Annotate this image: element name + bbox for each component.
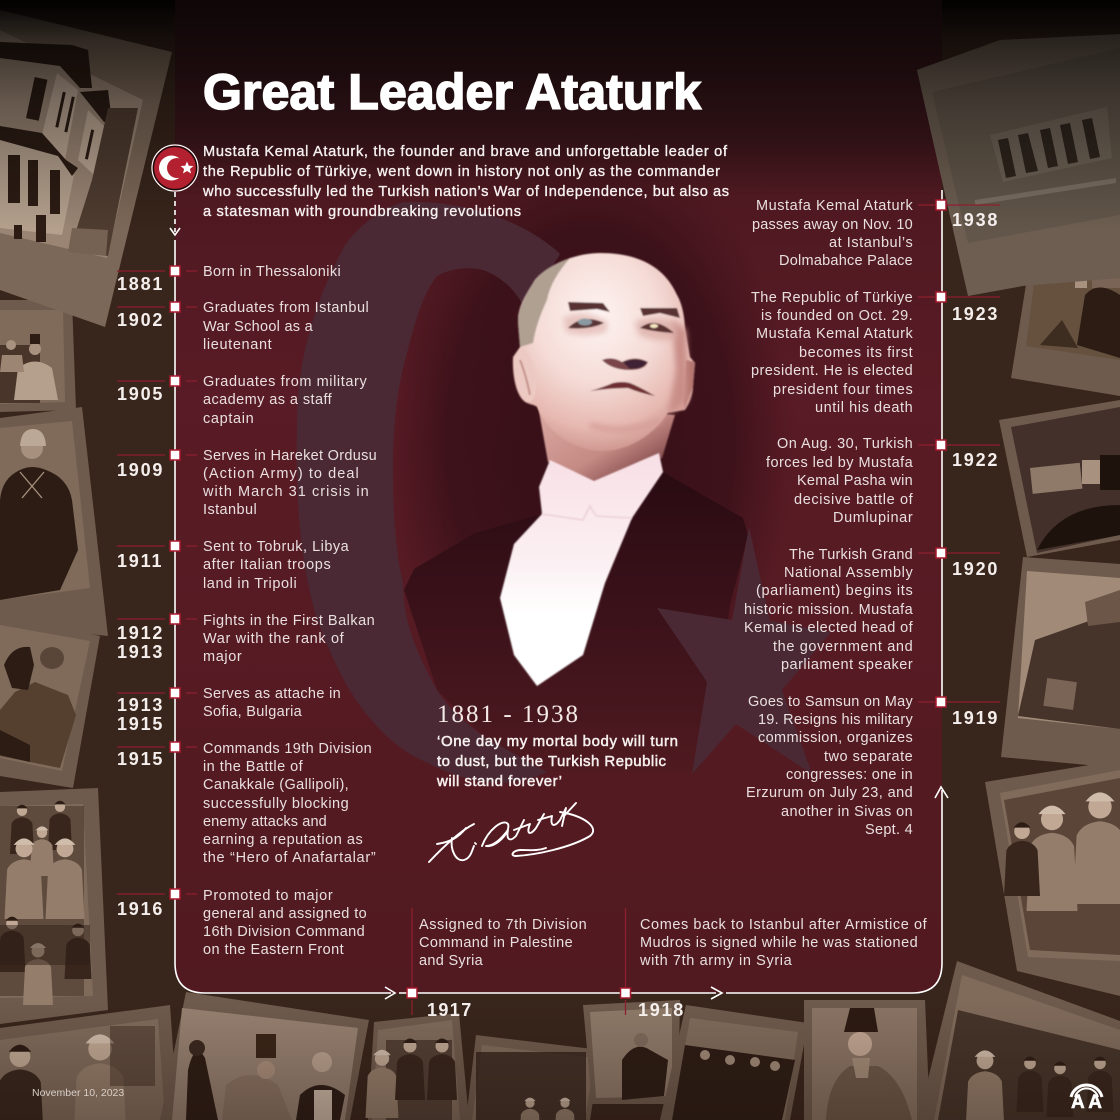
1916 entry [117,888,367,958]
1920 entry: historic mission. Mustafa [744,602,914,618]
1902 entry: lieutenant [203,337,272,353]
1905 entry: 1905 [117,384,164,404]
1915 entry: the “Hero of Anafartalar” [203,850,376,866]
flag watermark: star [657,527,831,774]
1912 1913 entry [117,613,375,665]
1938 entry: passes away on Nov. 10 [752,217,913,233]
1915 entry [117,741,376,866]
1911 entry [117,539,350,592]
quote: to dust, but the Turkish Republic [437,753,666,770]
1909 entry: 1909 [117,460,164,480]
1919 entry: Goes to Samsun on May [748,694,913,710]
1922 entry: On Aug. 30, Turkish [777,436,913,452]
neck [537,400,675,484]
photo: crowd [466,1035,601,1120]
shirt and collar [500,453,663,686]
1938 entry: at Istanbul’s [829,235,913,251]
1919 entry: Sept. 4 [865,822,913,838]
1905 entry: academy as a staff [203,392,333,408]
intro text: the Republic of Türkiye, went down in history not only as the commander [203,164,720,180]
central burgundy panel [175,0,942,993]
1913 1915 entry: Serves as attache in [203,686,341,702]
1913 1915 entry: 1913 [117,695,164,715]
photo: reception with column [1011,210,1120,396]
1917 entry: Assigned to 7th Division [419,917,587,933]
1918 entry: 1918 [638,1000,685,1020]
1915 entry: in the Battle of [203,759,304,775]
1916 entry: 1916 [117,899,164,919]
1909 entry: Serves in Hareket Ordusu [203,448,377,464]
photo: two men bottom left [0,1005,178,1120]
1912 1913 entry: 1913 [117,642,164,662]
photo: speaker on steps [1001,557,1120,768]
1923 entry [751,290,1000,416]
dark right fade over photos [917,0,1120,230]
1920 entry: parliament speaker [781,657,913,673]
quote: will stand forever’ [436,773,562,790]
portrait of Ataturk [404,253,748,772]
1912 1913 entry: major [203,649,242,665]
1913 1915 entry: Sofia, Bulgaria [203,704,303,720]
1916 entry: general and assigned to [203,906,367,922]
1923 entry: is founded on Oct. 29. [761,308,913,324]
1913 1915 entry [117,686,341,734]
photo: soldier [0,407,108,636]
1912 1913 entry: 1912 [117,623,164,643]
1905 entry: captain [203,411,254,427]
1938 entry: 1938 [952,210,999,230]
1922 entry: decisive battle of [794,492,914,508]
1902 entry [117,300,369,353]
1902 entry: 1902 [117,310,164,330]
1919 entry: another in Sivas on [781,804,913,820]
1919 entry: congresses: one in [786,767,913,783]
1909 entry: with March 31 crisis in [202,484,369,500]
1938 entry [752,198,1000,269]
1911 entry: after Italian troops [203,557,331,573]
1920 entry: 1920 [952,559,999,579]
left timeline entries [117,264,377,958]
1923 entry: Mustafa Kemal Ataturk [756,326,913,342]
1922 entry [766,436,1000,526]
1917 entry: and Syria [419,953,484,969]
1905 entry [117,374,367,427]
1902 entry: War School as a [203,319,314,335]
date: November 10, 2023 [32,1087,124,1099]
1916 entry: Promoted to major [203,888,333,904]
1909 entry: (Action Army) to deal [203,466,359,482]
1911 entry: 1911 [117,551,163,571]
1920 entry [744,547,1000,673]
photo: group of soldiers [0,788,108,1024]
1938 entry: Mustafa Kemal Ataturk [756,198,913,214]
1919 entry: Erzurum on July 23, and [746,785,913,801]
1915 entry: Canakkale (Gallipoli), [203,777,349,793]
1916 entry: on the Eastern Front [203,942,344,958]
1918 entry [620,908,928,1020]
dark left fade over photos [0,0,175,230]
1911 entry: Sent to Tobruk, Libya [203,539,350,555]
intro text: Mustafa Kemal Ataturk, the founder and brave and unforgettable leader of [203,144,728,160]
flag watermark: crescent [297,202,560,783]
intro text [202,144,729,220]
1902 entry: Graduates from Istanbul [203,300,369,316]
photo: standing officer [583,1000,680,1104]
1917 entry: Command in Palestine [419,935,573,951]
title: Great Leader Ataturk [203,64,701,120]
1923 entry: 1923 [952,304,999,324]
AA logo: AA [1071,1092,1102,1113]
photo: group walking [985,760,1120,996]
1909 entry: Istanbul [203,502,257,518]
1912 1913 entry: War with the rank of [203,631,345,647]
1920 entry: the government and [773,639,913,655]
1881 entry [117,264,341,294]
intro text: who successfully led the Turkish nation’s War of Independence, but also as [202,184,729,200]
photo: soldier with helmet [0,616,100,788]
quote: ‘One day my mortal body will turn [437,733,678,750]
1913 1915 entry: 1915 [117,714,164,734]
lifespan dates: 1881 - 1938 [437,701,578,728]
1920 entry: Kemal is elected head of [744,620,914,636]
1920 entry: National Assembly [784,565,913,581]
1923 entry: president four times [773,382,913,398]
1922 entry: Dumlupinar [833,510,913,526]
1919 entry: two separate [824,749,913,765]
flag icon [152,145,198,191]
bottom timeline entries [407,908,928,1020]
1919 entry: 1919 [952,708,999,728]
1915 entry: earning a reputation as [203,832,363,848]
photo: flags [999,400,1120,557]
1915 entry: 1915 [117,749,164,769]
collar shadow [542,506,632,520]
dark bottom fade [0,1000,1120,1120]
1912 1913 entry: Fights in the First Balkan [203,613,375,629]
dark halo behind portrait [385,140,795,740]
1916 entry: 16th Division Command [203,924,365,940]
1922 entry: Kemal Pasha win [797,473,913,489]
1923 entry: president. He is elected [751,363,913,379]
1918 entry: Comes back to Istanbul after Armistice of [640,917,928,933]
photo: Ataturk with men in robes [160,992,369,1120]
1920 entry: (parliament) begins its [756,583,913,599]
1919 entry [746,694,1000,838]
1917 entry [407,908,587,1020]
1909 entry [117,448,377,518]
1922 entry: forces led by Mustafa [766,455,914,471]
1920 entry: The Turkish Grand [789,547,913,563]
1919 entry: 19. Resigns his military [758,712,913,728]
photo: men in suits [660,1005,808,1120]
1922 entry: 1922 [952,450,999,470]
1881 entry: Born in Thessaloniki [203,264,341,280]
1911 entry: land in Tripoli [203,576,297,592]
photo: mausoleum [917,34,1120,296]
1923 entry: until his death [815,400,913,416]
1881 entry: 1881 [117,274,164,294]
intro text: a statesman with groundbreaking revolutions [203,204,521,220]
1915 entry: Commands 19th Division [203,741,372,757]
1918 entry: Mudros is signed while he was stationed [640,935,918,951]
timeline path [170,190,948,999]
photo: house [0,10,172,327]
1919 entry: commission, organizes [758,730,913,746]
1905 entry: Graduates from military [203,374,367,390]
signature [429,803,593,862]
suit [404,472,748,772]
1915 entry: enemy attacks and [203,814,327,830]
1938 entry: Dolmabahce Palace [779,253,913,269]
1915 entry: successfully blocking [203,796,349,812]
head [513,253,695,451]
photo: soldiers crowd bottom right [918,961,1120,1120]
photo: officers in group [366,1013,469,1120]
1917 entry: 1917 [427,1000,473,1020]
photo: officers [0,300,76,412]
1923 entry: becomes its first [799,345,913,361]
right timeline entries [744,198,1000,838]
1918 entry: with 7th army in Syria [639,953,793,969]
photo: portrait in uniform [804,1000,930,1120]
quote [436,733,678,790]
1923 entry: The Republic of Türkiye [751,290,913,306]
